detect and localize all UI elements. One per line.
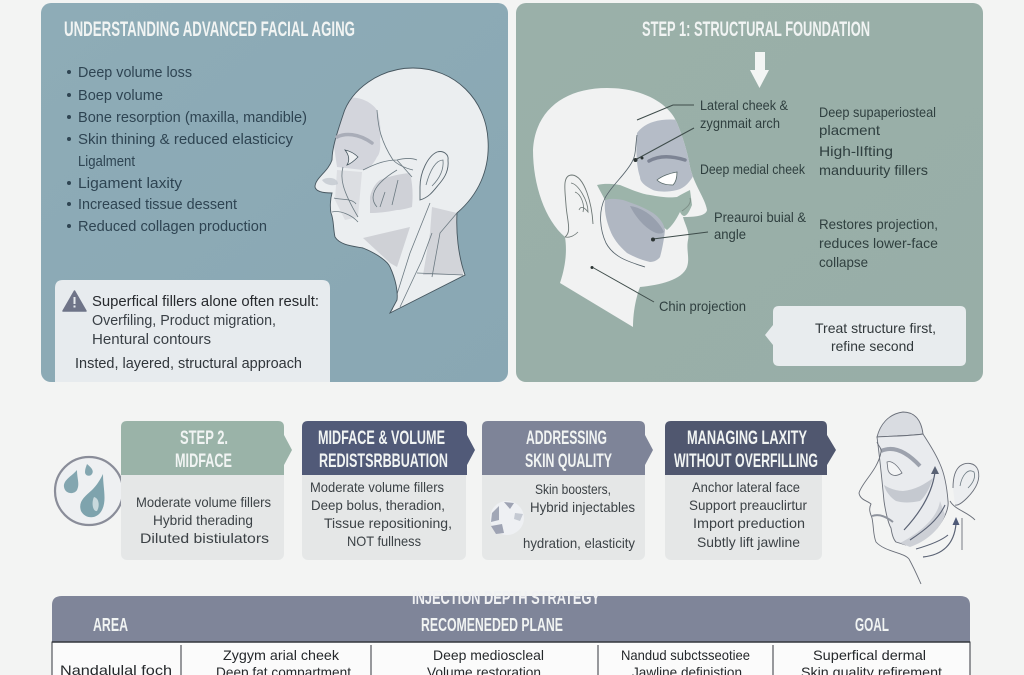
table: injection depth strategy: Superfical dermal (813, 647, 926, 663)
callout: treat structure first: refine second (831, 338, 914, 354)
card: midface and volume redistribution: NOT fullness (347, 533, 421, 549)
card: midface and volume redistribution: Tissue repositioning, (324, 515, 452, 531)
text: restores projection (819, 216, 938, 270)
label: preauricular and angle: Preauroi buial & (714, 209, 807, 225)
icon: skin sphere (490, 501, 524, 535)
text: deep placement (819, 104, 936, 178)
card: addressing skin quality: hydration, elasticity (523, 535, 635, 551)
card: midface and volume redistribution (302, 421, 475, 560)
table header: RECOMENEDED PLANE (421, 615, 563, 635)
text: deep placement: manduurity fillers (819, 162, 928, 178)
card: managing laxity without overfilling: WITHOUT OVERFILLING (674, 451, 818, 472)
card: step 2 midface: Moderate volume fillers (136, 494, 271, 510)
callout: superficial fillers warning: Hentural contours (92, 331, 211, 348)
table: injection depth strategy: Zygym arial cheek (223, 647, 340, 663)
label: preauricular and angle (651, 209, 807, 242)
arrow: down (750, 52, 769, 88)
list: aging factors: Deep volume loss (78, 64, 192, 81)
label: deep medial cheek: Deep medial cheek (700, 161, 806, 177)
text: restores projection: Restores projection, (819, 216, 938, 232)
text: restores projection: reduces lower-face (819, 235, 938, 251)
card: step 2 midface: Diluted bistiulators (140, 530, 269, 546)
card: midface and volume redistribution: Moderate volume fillers (310, 479, 444, 495)
card: addressing skin quality: SKIN QUALITY (525, 451, 612, 472)
list: aging factors: Ligalment (78, 153, 136, 170)
callout: superficial fillers warning: Superfical fillers alone often result: (92, 293, 319, 310)
label: preauricular and angle: angle (714, 226, 746, 242)
illustration: aged head profile with anatomy (315, 68, 488, 313)
illustration: head profile with treatment zones (533, 88, 707, 327)
card: managing laxity without overfilling: Support preauclirtur (689, 497, 807, 513)
list: aging factors: Bone resorption (maxilla, mandible) (78, 109, 307, 126)
list: aging factors: Skin thining & reduced elasticicy (78, 131, 293, 148)
heading: understanding advanced facial aging: UNDERSTANDING ADVANCED FACIAL AGING (64, 18, 355, 41)
list: aging factors: Increased tissue dessent (78, 196, 238, 213)
label: chin projection (590, 266, 746, 314)
text: restores projection: collapse (819, 254, 868, 270)
list: aging factors (67, 64, 307, 235)
card: addressing skin quality (482, 421, 653, 560)
card: addressing skin quality: ADDRESSING (526, 428, 607, 449)
card: step 2 midface: STEP 2. (180, 428, 228, 449)
table: injection depth strategy: Nandud subctsseotiee (621, 647, 750, 663)
card: managing laxity without overfilling: Import preduction (693, 515, 805, 531)
card: managing laxity without overfilling: Subtly lift jawline (697, 534, 800, 550)
card: managing laxity without overfilling (665, 421, 836, 560)
illustration: face lift vectors (859, 412, 979, 584)
callout: superficial fillers warning (55, 280, 330, 382)
card: step 2 midface: Hybrid therading (153, 512, 253, 528)
callout: treat structure first: Treat structure first, (815, 320, 936, 336)
label: chin projection: Chin projection (659, 298, 746, 314)
card: addressing skin quality: Skin boosters, (535, 481, 611, 497)
card: managing laxity without overfilling: Anchor lateral face (692, 479, 800, 495)
card: midface and volume redistribution: MIDFACE & VOLUME (318, 428, 445, 449)
callout: superficial fillers warning: Insted, layered, structural approach (75, 355, 302, 372)
list: aging factors: Ligament laxity (78, 175, 183, 192)
table header: GOAL (855, 615, 889, 635)
text: deep placement: Deep supaperiosteal (819, 104, 936, 120)
text: deep placement: placment (819, 122, 880, 138)
icon: warning triangle (63, 291, 86, 311)
panel: understanding advanced facial aging (41, 3, 508, 382)
card: addressing skin quality: Hybrid injectables (530, 499, 635, 515)
label: lateral cheek and zygomatic arch: Lateral cheek & (700, 97, 789, 113)
icon: water drops (55, 457, 123, 525)
card: midface and volume redistribution: Deep bolus, theradion, (311, 497, 445, 513)
table header (52, 588, 970, 642)
card: managing laxity without overfilling: MANAGING LAXITY (687, 428, 807, 449)
list: aging factors: Boep volume (78, 87, 163, 104)
table: injection depth strategy (52, 588, 970, 675)
label: lateral cheek and zygomatic arch: zygnmait arch (700, 115, 780, 131)
table: injection depth strategy: Deep medioscleal (433, 647, 544, 663)
callout: superficial fillers warning: Overfiling, Product migration, (92, 312, 276, 329)
card: step 2 midface (121, 421, 292, 560)
callout: treat structure first (765, 306, 966, 366)
table header: AREA (93, 615, 128, 635)
list: aging factors: Reduced collagen production (78, 218, 267, 235)
text: deep placement: High-lIfting (819, 143, 893, 159)
heading: step 1 structural foundation: STEP 1: STRUCTURAL FOUNDATION (642, 18, 870, 41)
panel: step 1 structural foundation (516, 3, 983, 382)
label: lateral cheek and zygomatic arch (634, 97, 789, 162)
table header: INJECTION DEPTH STRATEGY (412, 588, 600, 608)
card: step 2 midface: MIDFACE (175, 451, 232, 472)
card: midface and volume redistribution: REDISTSRBBUATION (319, 451, 448, 472)
